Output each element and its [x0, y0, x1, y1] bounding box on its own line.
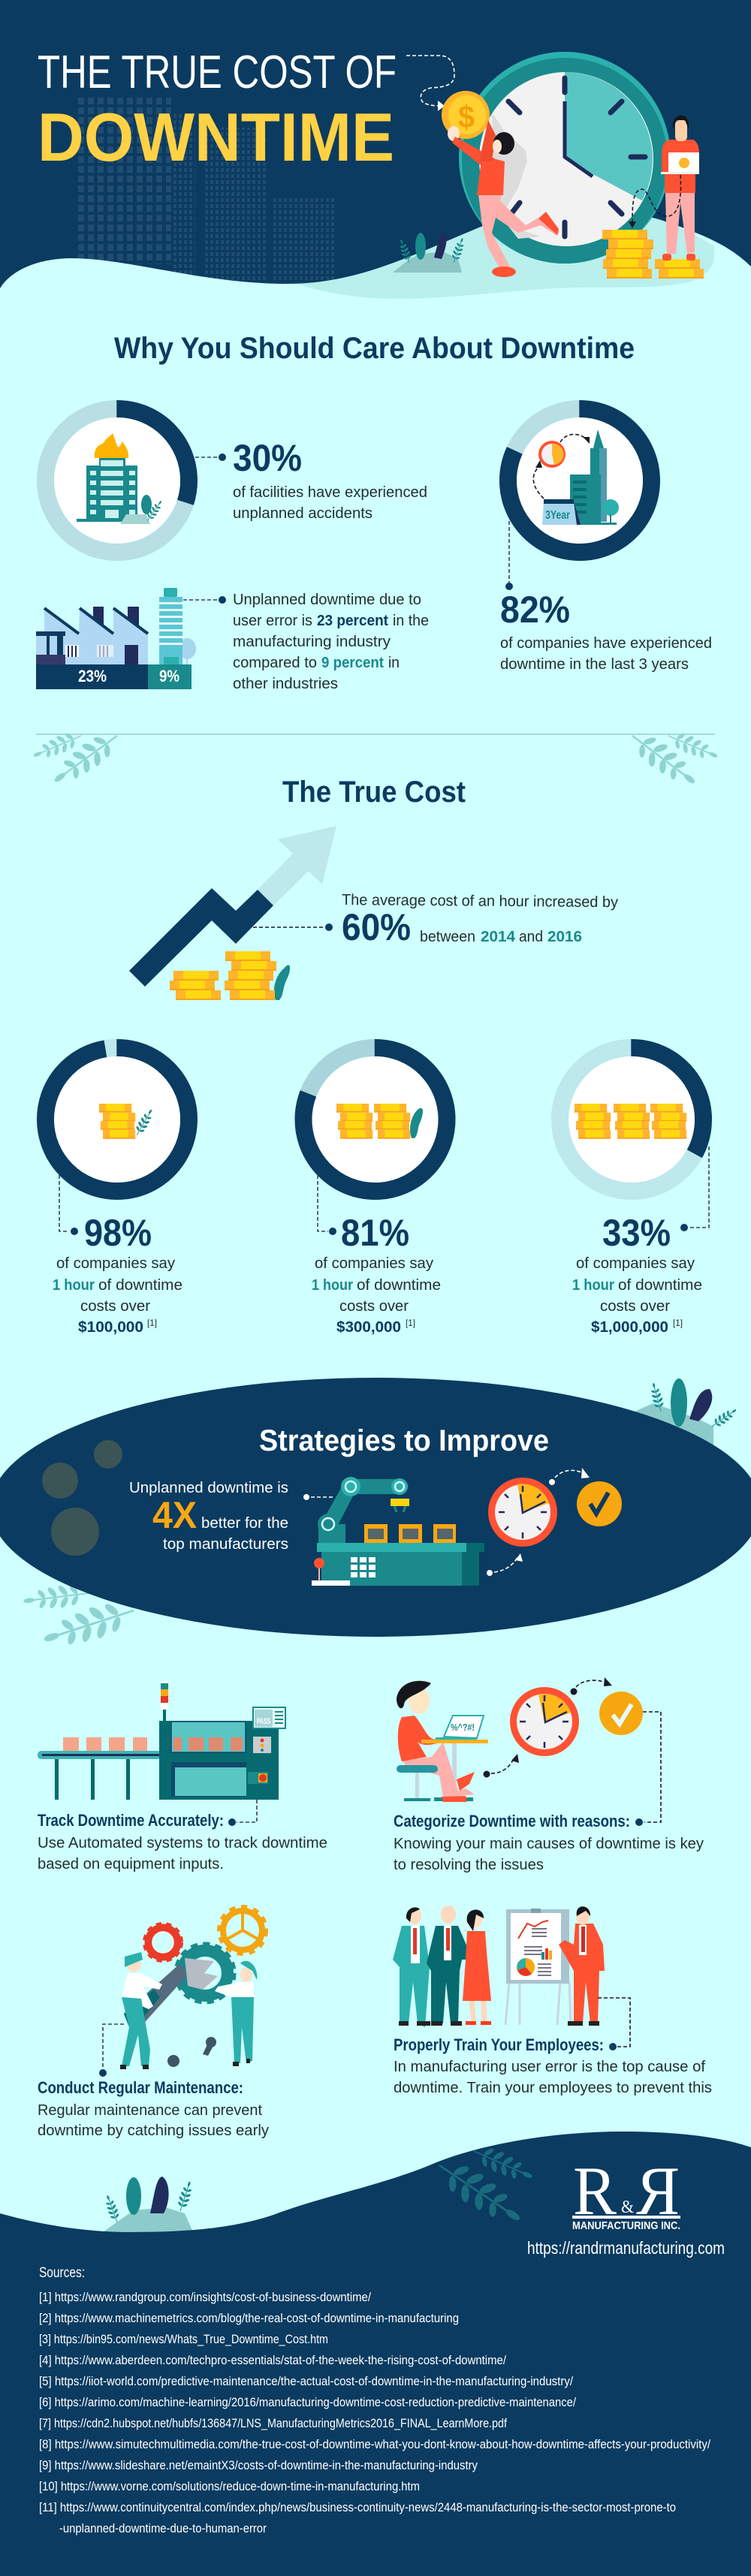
text: 33% detail: of companies say — [576, 1255, 695, 1272]
text: 81% detail: 1 hour — [312, 1276, 353, 1294]
sources: -unplanned-downtime-due-to-human-error — [59, 2522, 267, 2535]
stat: 81% — [312, 1212, 441, 1336]
connector: factory — [183, 596, 226, 604]
text: categorize — [394, 1812, 704, 1873]
connector: maintenance — [99, 2024, 124, 2077]
text: user error: other industries — [233, 675, 338, 692]
sources: [9] https://www.slideshare.net/emaintX3/costs-of-downtime-in-the-manufacturing-industry — [39, 2459, 478, 2472]
text: user error: Unplanned downtime due to — [233, 591, 421, 608]
person red dress — [463, 1910, 491, 2025]
text: maintenance: Regular maintenance can prevent — [38, 2101, 262, 2119]
stat: 30%: 30% — [233, 437, 302, 479]
text: training — [394, 2035, 712, 2096]
icon: robot arm machine — [303, 1477, 484, 1586]
text: maintenance: Conduct Regular Maintenance: — [38, 2078, 243, 2097]
text: 81% detail: [1] — [406, 1318, 415, 1328]
text: 98% detail: costs over — [80, 1297, 150, 1315]
dashed arrow from title — [406, 56, 454, 111]
connector: categorize — [635, 1712, 661, 1826]
hero wave — [0, 209, 751, 323]
leaves: divider right — [623, 724, 721, 794]
text: companies: downtime in the last 3 years — [500, 655, 689, 673]
title: THE TRUE COST OF — [38, 47, 397, 98]
text: companies — [500, 634, 712, 673]
text: years: and — [519, 928, 543, 945]
illustration: training team — [393, 1906, 605, 2027]
pale hill — [297, 209, 714, 299]
text: user error: manufacturing industry — [233, 633, 391, 650]
plant: footer — [101, 2177, 195, 2234]
heading: the true cost: The True Cost — [282, 776, 466, 809]
connector: 81% — [318, 1175, 336, 1235]
text: facilities — [233, 484, 427, 522]
text: years: between — [420, 928, 475, 945]
person with laptop — [629, 116, 699, 261]
text: 33% detail: costs over — [600, 1297, 670, 1315]
heading: strategies: Strategies to Improve — [259, 1424, 549, 1457]
coins stack — [602, 230, 704, 279]
logo: & — [621, 2198, 634, 2217]
sources: [7] https://cdn2.hubspot.net/hubfs/136847/LNS_ManufacturingMetrics2016_FINAL_LearnMore.pdf — [39, 2417, 507, 2430]
text: 33% detail — [572, 1255, 702, 1336]
text: 33% detail: [1] — [673, 1318, 683, 1328]
text: average cost: The average cost of an hour increased by — [342, 891, 619, 911]
plant — [393, 232, 467, 273]
icon: clock — [488, 1478, 557, 1547]
sources: [4] https://www.aberdeen.com/techpro-essentials/stat-of-the-week-the-rising-cost-of-downtime/ — [39, 2354, 506, 2367]
text: 4x better: better for the — [201, 1514, 288, 1532]
sources: [3] https://bin95.com/news/Whats_True_Downtime_Cost.htm — [39, 2333, 328, 2346]
text: 98% detail: of companies say — [56, 1255, 176, 1272]
person presenter — [559, 1906, 605, 2026]
text: user error: 9 percent — [321, 654, 384, 671]
text: categorize: Knowing your main causes of downtime is key — [394, 1835, 704, 1852]
icon: coins two stacks — [336, 1104, 423, 1139]
person with coin: $ — [458, 99, 475, 134]
person with coin — [442, 91, 559, 277]
worker left — [120, 1952, 162, 2069]
icon: coins one stack — [99, 1104, 156, 1139]
stat: 81%: 81% — [341, 1212, 409, 1254]
text: track downtime: Track Downtime Accurately: — [38, 1811, 224, 1830]
connector: 33% — [680, 1146, 709, 1231]
icon: coins three stacks — [575, 1104, 686, 1139]
heading: why care: Why You Should Care About Downtime — [114, 332, 635, 365]
text: facilities: unplanned accidents — [233, 505, 372, 522]
sources — [39, 2265, 710, 2535]
clock — [459, 52, 671, 264]
sources: [1] https://www.randgroup.com/insights/cost-of-business-downtime/ — [39, 2291, 371, 2304]
skyline backdrop — [77, 95, 335, 283]
icon: burning building — [77, 433, 165, 524]
stat: 98%: 98% — [84, 1212, 152, 1254]
hero header — [0, 0, 751, 323]
stat: 33% — [572, 1212, 702, 1336]
text: user error: in — [388, 654, 400, 671]
footer panel — [0, 2132, 751, 2576]
text: 4x better: Unplanned downtime is — [129, 1479, 288, 1496]
icon: clock and check — [484, 1677, 643, 1778]
gears — [145, 1907, 266, 2002]
connector: 60% — [253, 923, 333, 931]
text: user error — [233, 591, 429, 692]
text: track downtime: Use Automated systems to track downtime — [38, 1834, 327, 1851]
person teal suit — [393, 1908, 430, 2027]
text: track downtime — [38, 1811, 327, 1872]
stat: 33%: 33% — [602, 1212, 671, 1254]
donut: 81% — [303, 1048, 447, 1191]
text: 33% detail: of downtime — [618, 1276, 702, 1294]
connector: training — [598, 1998, 630, 2050]
logo: Я — [636, 2153, 680, 2229]
icon: factory comparison — [36, 588, 196, 689]
connector: 98% — [59, 1175, 78, 1235]
logo — [572, 2153, 680, 2232]
text: 81% detail: of companies say — [315, 1255, 434, 1272]
text: years: 2014 — [481, 928, 516, 945]
text: years — [420, 928, 582, 945]
arrows: strategy dashes — [487, 1468, 590, 1576]
text: categorize: to resolving the issues — [394, 1856, 544, 1873]
text: training: In manufacturing user error is the top cause of — [394, 2058, 705, 2075]
text: 33% detail: $1,000,000 — [591, 1318, 668, 1336]
illustration: track machine — [38, 1681, 286, 1800]
ghost coins — [42, 1440, 122, 1556]
text: 4x better: top manufacturers — [163, 1535, 288, 1553]
stat: 82%: 82% — [500, 589, 570, 631]
text: user error: compared to — [233, 654, 317, 671]
sources: [11] https://www.continuitycentral.com/index.php/news/business-continuity-news/2448-manufacturing-is-the-sector-most-prone-to — [39, 2501, 676, 2514]
person dark suit — [427, 1906, 476, 2026]
donut: 98% — [45, 1048, 189, 1191]
leaves: under banner — [22, 1581, 139, 1656]
text: user error: in the — [393, 612, 429, 629]
text: 98% detail: [1] — [147, 1318, 157, 1328]
connector: 30% — [195, 453, 226, 461]
chart: rising arrow — [129, 826, 336, 987]
text: 81% detail: costs over — [339, 1297, 409, 1315]
text: 4x better: 4X — [152, 1494, 197, 1536]
leaves: footer — [429, 2140, 537, 2234]
sources: [2] https://www.machinemetrics.com/blog/the-real-cost-of-downtime-in-manufacturing — [39, 2312, 459, 2325]
text: categorize: Categorize Downtime with reasons: — [394, 1812, 630, 1830]
panel: strategies banner — [0, 1378, 751, 1637]
text: user error: user error is — [233, 612, 312, 629]
text: training: downtime. Train your employees to prevent this — [394, 2079, 712, 2096]
sources: [10] https://www.vorne.com/solutions/reduce-down-time-in-manufacturing.htm — [39, 2480, 420, 2493]
text: 98% detail — [53, 1255, 182, 1336]
donut: 33% — [560, 1048, 703, 1191]
leaves: divider left — [30, 724, 125, 793]
text: 98% detail: 1 hour — [53, 1276, 95, 1294]
text: maintenance — [38, 2078, 270, 2139]
icon: factory comparison: 23% — [78, 667, 107, 685]
text: maintenance: downtime by catching issues early — [38, 2122, 270, 2139]
icon: calendar clock tower: 3Year — [545, 509, 570, 522]
text: 4x better — [129, 1479, 288, 1553]
text: 98% detail: of downtime — [98, 1276, 182, 1294]
plant: strategies top right — [635, 1378, 739, 1457]
text: facilities: of facilities have experienced — [233, 484, 427, 501]
donut: 30% facilities — [45, 408, 189, 553]
illustration: track machine: PASS — [257, 1717, 270, 1726]
text: 81% detail: of downtime — [357, 1276, 441, 1294]
text: 81% detail: $300,000 — [336, 1318, 401, 1336]
text: companies: of companies have experienced — [500, 634, 712, 652]
sources: [5] https://iiot-world.com/predictive-maintenance/the-actual-cost-of-downtime-in-the-manufacturing-industry/ — [39, 2375, 573, 2388]
donut: 82% companies — [508, 408, 652, 553]
illustration: maintenance workers — [120, 1907, 266, 2069]
icon: calendar clock tower — [533, 429, 619, 525]
stat: 60%: 60% — [342, 906, 411, 948]
title: downtime: DOWNTIME — [38, 100, 394, 176]
text: years: 2016 — [547, 928, 582, 945]
text: 98% detail: $100,000 — [78, 1318, 143, 1336]
text: user error: 23 percent — [317, 612, 388, 629]
worker right — [215, 1961, 257, 2066]
text: 33% detail: 1 hour — [572, 1276, 614, 1294]
connector: track — [228, 1800, 257, 1826]
sources: Sources: — [39, 2265, 85, 2281]
connector: 82% — [505, 521, 513, 590]
icon: check badge — [577, 1481, 622, 1526]
illustration: man at desk — [397, 1681, 488, 1802]
bolts — [167, 2037, 216, 2067]
stat: 98% — [53, 1212, 182, 1336]
coins with plant — [170, 951, 290, 1000]
text: training: Properly Train Your Employees: — [394, 2035, 604, 2054]
logo: R — [573, 2153, 617, 2229]
icon: factory comparison: 9% — [159, 667, 179, 685]
wrench — [124, 1958, 218, 2029]
flip chart — [505, 1909, 571, 2025]
illustration: man at desk: %^?#! — [451, 1722, 475, 1733]
text: track downtime: based on equipment inputs. — [38, 1855, 224, 1872]
sources: [6] https://arimo.com/machine-learning/2016/manufacturing-downtime-cost-reduction-predictive-maintenance/ — [39, 2396, 576, 2409]
logo: MANUFACTURING INC. — [572, 2219, 680, 2232]
text: 81% detail — [312, 1255, 441, 1336]
